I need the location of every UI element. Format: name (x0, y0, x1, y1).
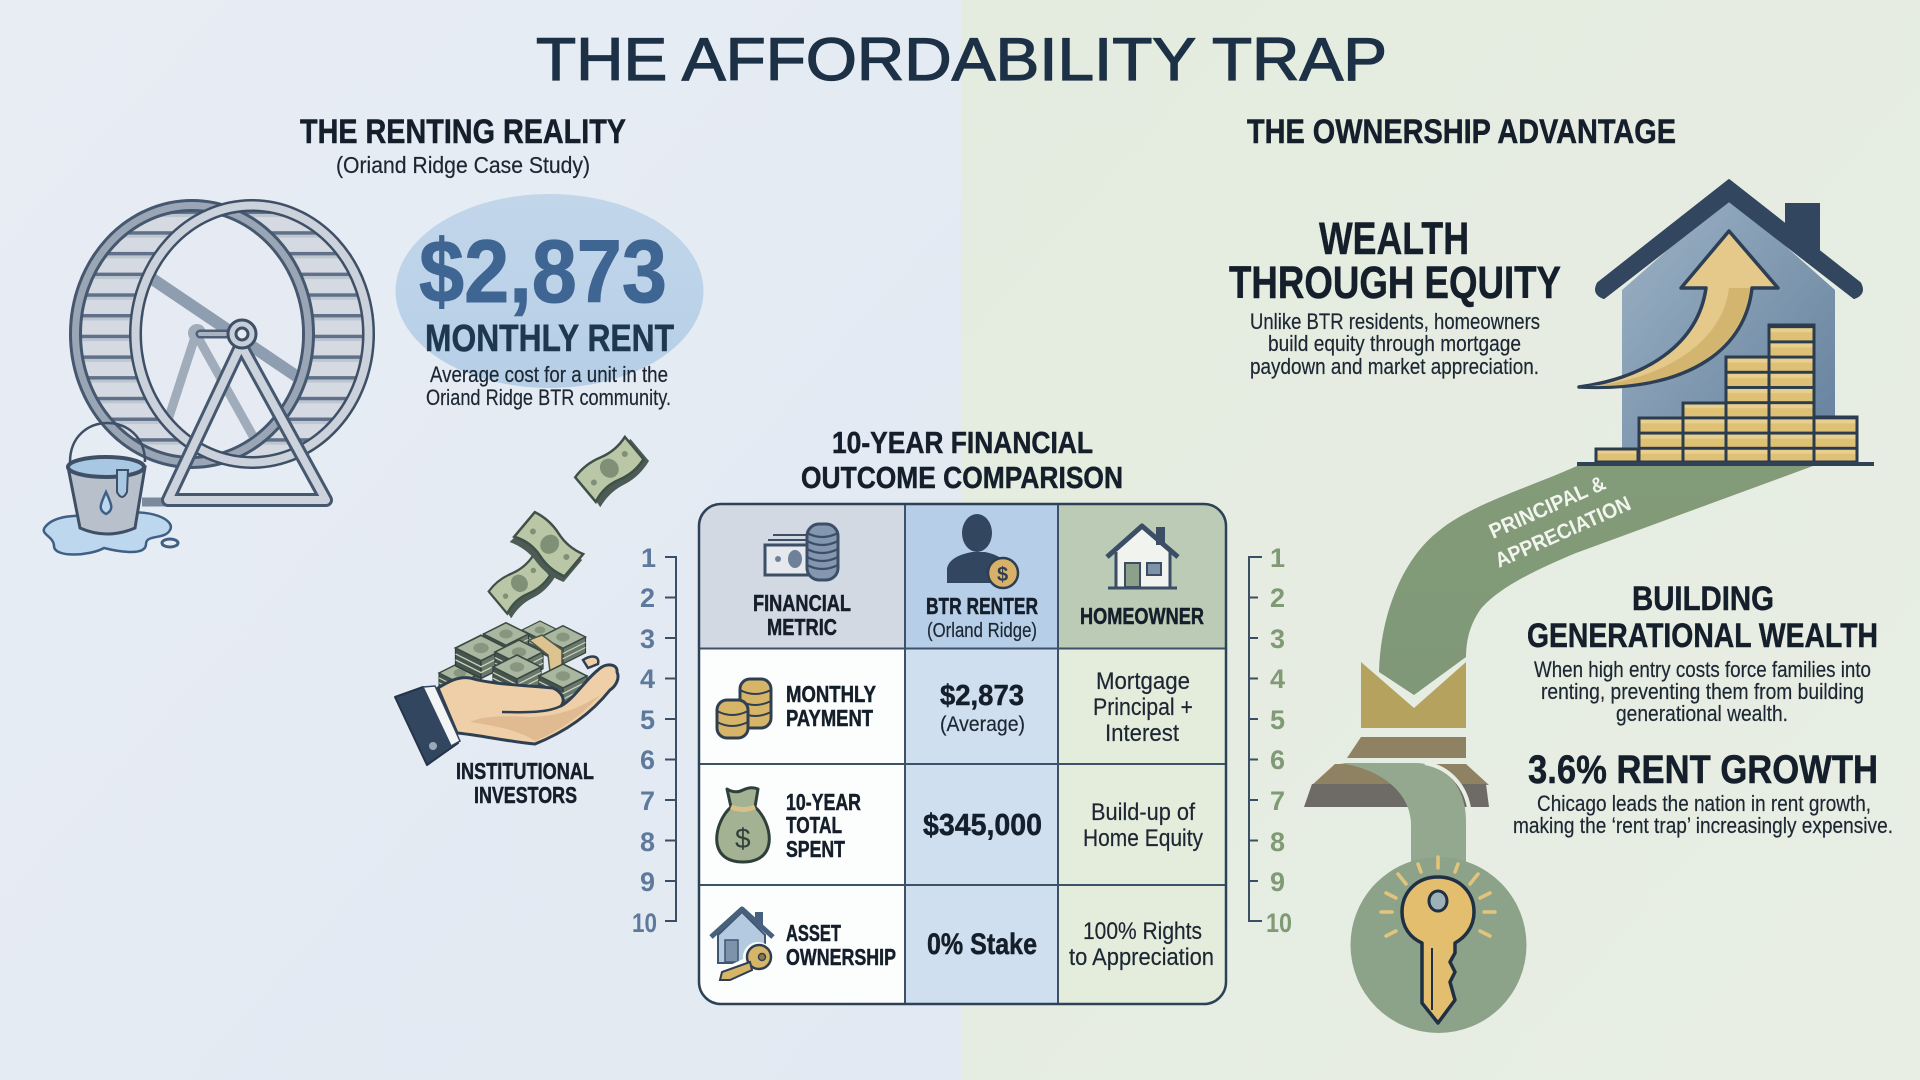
text: building generational wealth: BUILDING (1632, 580, 1774, 618)
row label: monthly payment (786, 681, 876, 731)
axis: years left: 2 (640, 583, 655, 613)
text: building generational wealth: generational wealth. (1616, 701, 1788, 726)
renter: monthly payment: (Average) (940, 713, 1025, 736)
icon: renter with coin: $ (997, 564, 1008, 586)
text: wealth through equity: build equity through mortgage (1268, 331, 1521, 356)
header: btr renter (926, 593, 1038, 642)
axis: years right: 1 (1270, 543, 1285, 573)
background: ownership side (961, 0, 1920, 1080)
icon: renter with coin (947, 514, 1018, 588)
axis: years right: 9 (1270, 867, 1285, 897)
text: wealth through equity: THROUGH EQUITY (1229, 257, 1561, 308)
arrow: flow to key (1340, 763, 1470, 870)
background: renting side (0, 0, 961, 1080)
icon: leaking bucket (44, 423, 178, 554)
icon: key in circle (1350, 857, 1526, 1033)
heading: the ownership advantage: THE OWNERSHIP ADVANTAGE (1247, 113, 1676, 151)
row label: 10-year total spent (786, 789, 861, 862)
owner: monthly payment: Interest (1105, 720, 1179, 747)
label: institutional investors: INVESTORS (474, 782, 577, 808)
axis: years right: 3 (1270, 624, 1285, 654)
label on path: PRINCIPAL & (1486, 472, 1609, 544)
axis: years right (1249, 543, 1292, 938)
description: Average cost for a unit in the (430, 362, 668, 387)
axis: years left: 4 (640, 664, 655, 694)
owner: monthly payment (1093, 668, 1193, 747)
axis: years right: 5 (1270, 705, 1285, 735)
axis: years left: 9 (640, 867, 655, 897)
axis: years right: 6 (1270, 745, 1285, 775)
owner: monthly payment: Principal + (1093, 694, 1193, 721)
row label: monthly payment: MONTHLY (786, 681, 876, 707)
renter: total spent: $345,000 (923, 807, 1042, 842)
label: institutional investors: INSTITUTIONAL (456, 758, 594, 784)
axis: years right: 7 (1270, 786, 1285, 816)
header: btr renter: BTR RENTER (926, 593, 1038, 619)
header: financial metric (753, 590, 851, 640)
axis: years left: 8 (640, 827, 655, 857)
label: institutional investors (456, 758, 594, 808)
owner: equity: Home Equity (1083, 825, 1203, 852)
row label: 10-year total spent: 10-YEAR (786, 789, 861, 815)
axis: years right: 10 (1266, 908, 1292, 938)
arrow: wealth flow path (1379, 466, 1813, 695)
big number: $2,873 (419, 221, 667, 321)
renter: monthly payment (940, 680, 1025, 736)
comparison table (699, 504, 1226, 1004)
header: financial metric: FINANCIAL (753, 590, 851, 616)
text: wealth through equity: paydown and market appreciation. (1250, 354, 1539, 379)
icon: coin stacks (717, 679, 771, 738)
row label: asset ownership (786, 920, 896, 970)
axis: years right: 2 (1270, 583, 1285, 613)
heading: the renting reality (300, 113, 626, 178)
text: wealth through equity (1229, 213, 1561, 379)
row label: 10-year total spent: TOTAL (786, 812, 842, 838)
arrow (1579, 231, 1778, 387)
owner: rights (1069, 918, 1214, 971)
text: building generational wealth: When high entry costs force families into (1534, 657, 1871, 682)
icon: house and key (711, 909, 773, 981)
row label: asset ownership: OWNERSHIP (786, 944, 896, 970)
axis: years left: 10 (632, 908, 657, 938)
label on path: APPRECIATION (1492, 492, 1634, 573)
icon: hand holding money (395, 621, 618, 765)
text: building generational wealth (1527, 580, 1878, 726)
row label: 10-year total spent: SPENT (786, 836, 845, 862)
axis: years right: 4 (1270, 664, 1285, 694)
axis: years left: 7 (640, 786, 655, 816)
title: THE AFFORDABILITY TRAP (536, 26, 1387, 93)
header: homeowner: HOMEOWNER (1080, 603, 1204, 629)
label: MONTHLY RENT (425, 318, 674, 360)
owner: equity: Build-up of (1091, 799, 1195, 826)
row label: asset ownership: ASSET (786, 920, 841, 946)
description: Oriand Ridge BTR community. (426, 385, 671, 410)
icon: flying money bills (488, 433, 652, 618)
text: rent growth stat: Chicago leads the nation in rent growth, (1537, 791, 1871, 816)
icon: cash and coins (765, 524, 838, 580)
header: financial metric: METRIC (767, 614, 837, 640)
icon: hamster wheel (60, 190, 390, 502)
axis: years left (632, 543, 676, 938)
description (426, 362, 671, 410)
row label: monthly payment: PAYMENT (786, 705, 873, 731)
heading: comparison: OUTCOME COMPARISON (801, 460, 1123, 495)
heading: comparison: 10-YEAR FINANCIAL (832, 425, 1093, 460)
axis: years right: 8 (1270, 827, 1285, 857)
icon: house with rising arrow and gold bars (1577, 180, 1874, 464)
renter: monthly payment: $2,873 (940, 680, 1024, 712)
gold bars (1596, 325, 1857, 462)
callout bubble (396, 194, 704, 388)
text: building generational wealth: renting, preventing them from building (1541, 679, 1864, 704)
heading: the renting reality: (Oriand Ridge Case Study) (336, 152, 590, 178)
text: rent growth stat (1513, 748, 1893, 838)
header: btr renter: (Orland Ridge) (927, 620, 1037, 642)
heading: comparison (801, 425, 1123, 495)
axis: years left: 5 (640, 705, 655, 735)
owner: equity (1083, 799, 1203, 852)
owner: rights: 100% Rights (1083, 918, 1202, 945)
heading: the renting reality: THE RENTING REALITY (300, 113, 626, 151)
icon: money bag (717, 788, 769, 862)
axis: years left: 6 (640, 745, 655, 775)
axis: years left: 1 (641, 543, 656, 573)
owner: rights: to Appreciation (1069, 944, 1214, 971)
callout: monthly rent (396, 194, 704, 410)
text: wealth through equity: WEALTH (1319, 213, 1469, 264)
renter: stake: 0% Stake (927, 928, 1037, 961)
axis: years left: 3 (640, 624, 655, 654)
icon: gold and brown funnel (1304, 662, 1489, 807)
icon: money bag: $ (735, 823, 751, 854)
text: wealth through equity: Unlike BTR residents, homeowners (1250, 309, 1540, 334)
icon: home (1107, 526, 1178, 588)
owner: monthly payment: Mortgage (1096, 668, 1190, 695)
